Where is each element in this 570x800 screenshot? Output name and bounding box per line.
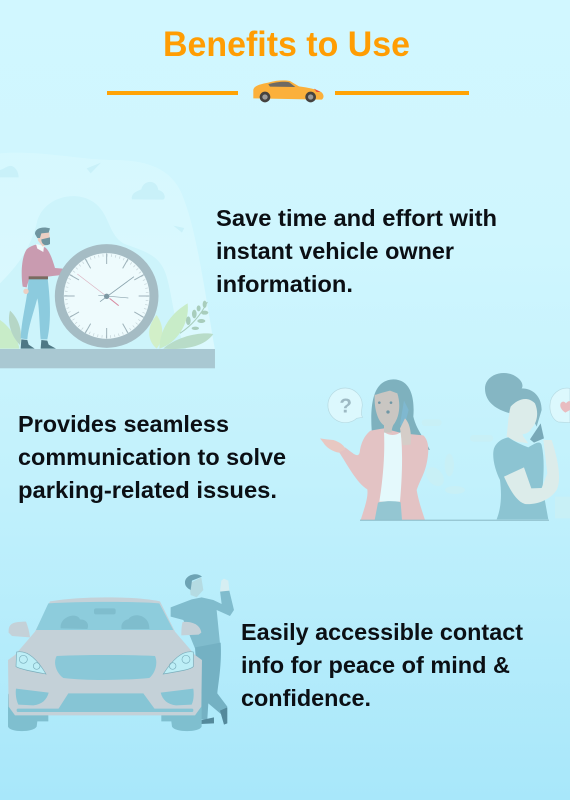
hand and phone (400, 401, 409, 430)
left plants (0, 311, 21, 349)
icon: orange sports car (253, 80, 324, 102)
text: communication: communication to solve (18, 444, 286, 470)
text: save time: information. (216, 271, 353, 297)
divider line left (107, 91, 238, 95)
clock (59, 249, 154, 343)
text: communication: Provides seamless (18, 411, 229, 437)
clock hands (100, 277, 134, 302)
illustration: two women on the phone (320, 373, 570, 521)
arm (504, 440, 559, 504)
hair and beard (35, 227, 50, 245)
jumper and arms (171, 591, 234, 648)
headlights (16, 652, 193, 674)
head (189, 577, 203, 597)
woman left (320, 379, 430, 520)
text: communication (18, 411, 286, 503)
jumper (22, 245, 63, 287)
belt (29, 276, 48, 279)
collar (36, 244, 44, 252)
boots (21, 339, 56, 349)
rear wheels (8, 693, 202, 731)
face (509, 399, 537, 440)
right plants (149, 301, 213, 349)
heart (560, 401, 570, 413)
title: Benefits to Use (163, 25, 410, 64)
windscreen (36, 602, 173, 630)
t-shirt (493, 437, 548, 519)
text: accessible: confidence. (241, 685, 371, 711)
hand (220, 579, 229, 592)
divider line right (335, 91, 469, 95)
text: save time: instant vehicle owner (216, 238, 454, 264)
head (37, 232, 50, 247)
top (379, 432, 402, 502)
hand (23, 289, 29, 294)
text: save time (216, 205, 497, 297)
title divider with car (107, 80, 469, 102)
car body (8, 597, 202, 715)
text: accessible: info for peace of mind & (241, 652, 510, 678)
hair (371, 379, 430, 450)
clouds and paper planes (0, 163, 184, 233)
woman right (485, 373, 570, 519)
face (375, 388, 399, 433)
ground bar (0, 349, 215, 368)
raised hand (320, 438, 345, 453)
heart speech bubble (550, 388, 570, 423)
grille (55, 655, 156, 680)
background blob (0, 153, 215, 350)
floor line (360, 520, 549, 521)
question speech bubble (328, 388, 363, 423)
question speech bubble: ? (339, 395, 352, 418)
text: accessible (241, 619, 523, 711)
illustration: man leaning on car (8, 574, 234, 731)
bumper strip (17, 709, 193, 712)
illustration: man with clock (0, 153, 215, 368)
side mirrors (9, 622, 201, 637)
shoes (201, 707, 227, 725)
phone (530, 423, 544, 443)
bumper vents (16, 689, 194, 712)
faint background leaves (422, 419, 570, 518)
text: accessible: Easily accessible contact (241, 619, 523, 645)
seats and mirror (61, 608, 149, 629)
text: save time: Save time and effort with (216, 205, 497, 231)
man (21, 227, 63, 349)
inner blob (0, 196, 187, 350)
hair (185, 574, 202, 590)
forehead hair (375, 386, 397, 395)
legs (195, 643, 227, 719)
eyes and mouth (378, 401, 392, 414)
jacket (339, 428, 428, 520)
text: communication: parking-related issues. (18, 477, 277, 503)
clock face (59, 249, 154, 343)
man (171, 574, 234, 725)
clock ticks (66, 255, 147, 337)
hair bun (485, 373, 542, 427)
neck (507, 417, 528, 443)
skirt (375, 501, 402, 520)
trousers (21, 276, 50, 339)
